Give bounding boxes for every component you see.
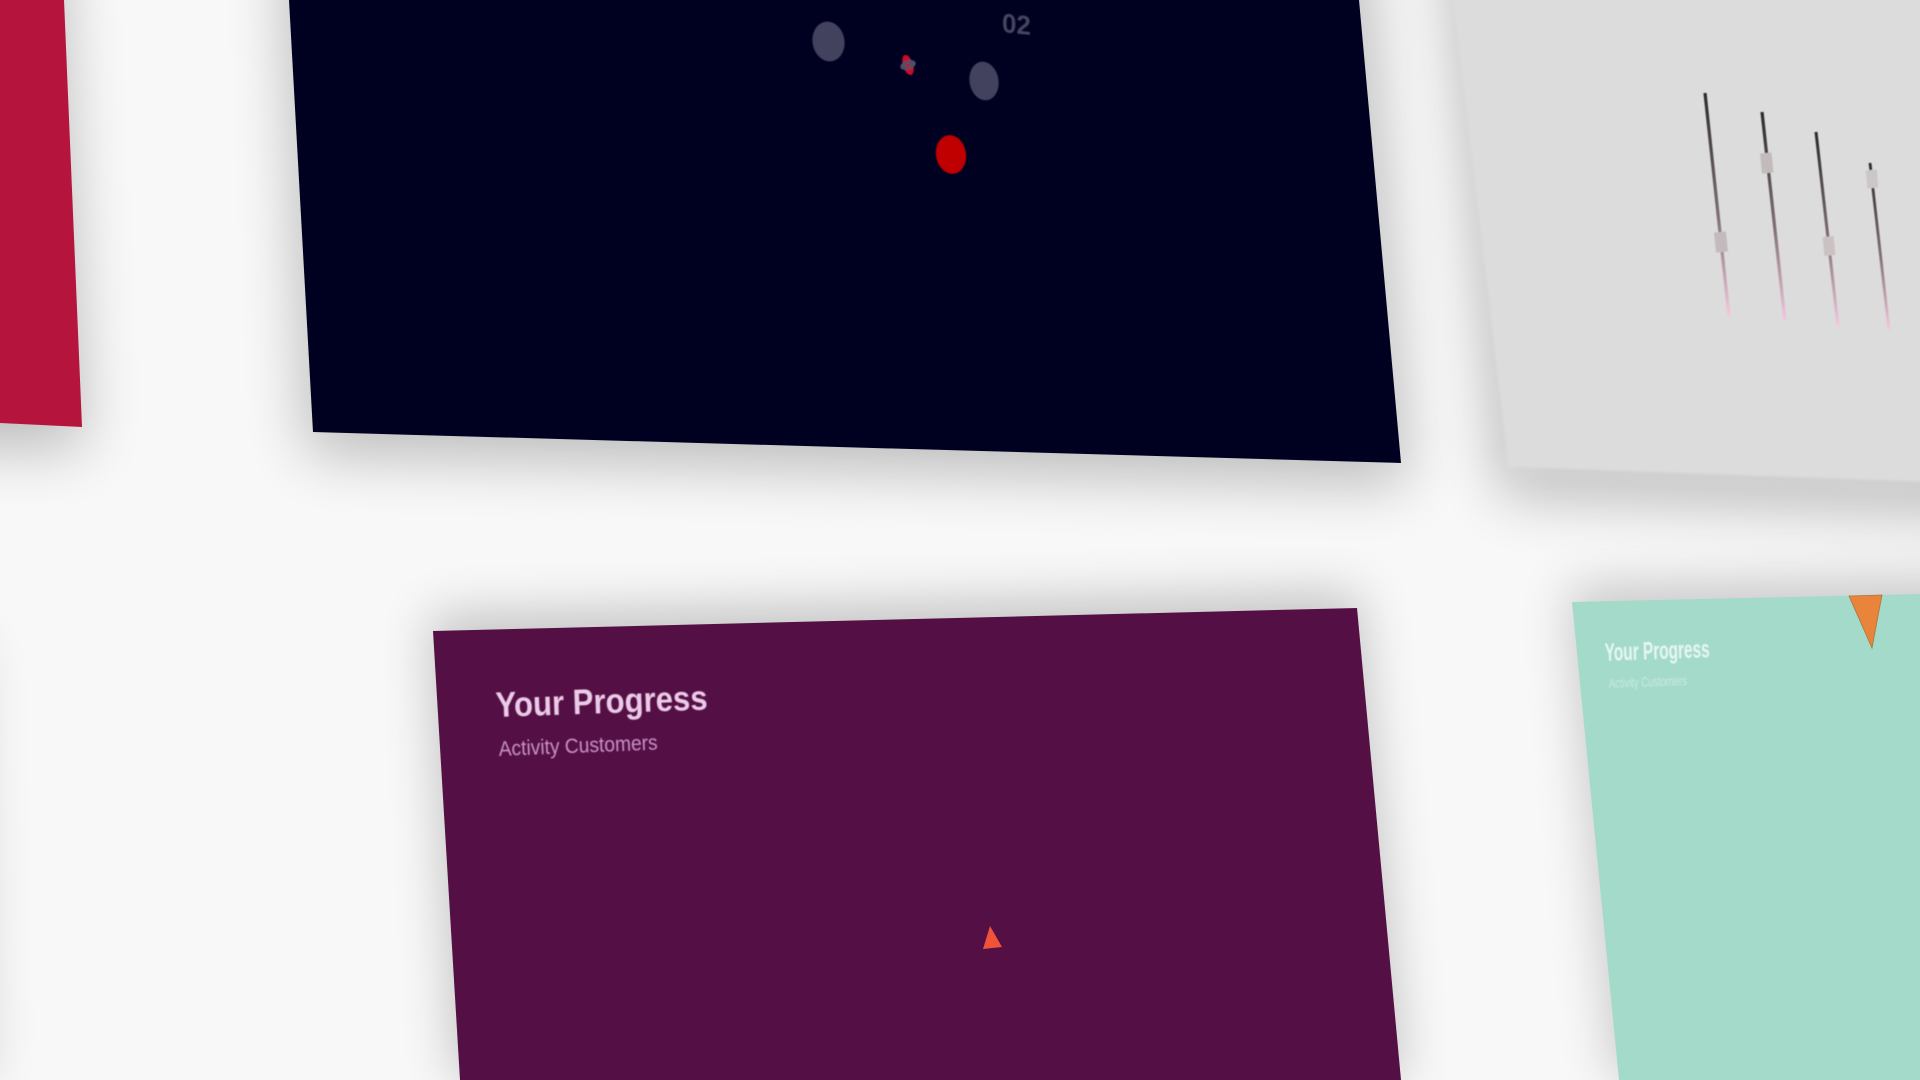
dot: grey left [809, 19, 848, 64]
slider 1 [1705, 93, 1729, 316]
panel: grey slide [1452, 0, 1920, 482]
subheading: Activity Customers: Activity Customers [1609, 672, 1687, 691]
icon: orange triangle [1849, 595, 1882, 648]
slider 2 [1760, 112, 1785, 321]
icon: red triangle [983, 926, 1002, 949]
panel: crimson slide [0, 0, 82, 427]
dot: red large [933, 133, 969, 176]
heading: Your Progress: Your Progress [1604, 635, 1710, 667]
number 02: 02 [1002, 7, 1031, 41]
panel: navy slide [289, 0, 1401, 463]
slider 4 [1866, 163, 1889, 330]
subheading: Activity Customers: Activity Customers [498, 732, 658, 761]
slider 3 [1816, 132, 1838, 326]
dot: small red and grey marker [897, 53, 919, 77]
panel: purple slide [433, 608, 1401, 1080]
dot: grey right [966, 59, 1002, 103]
heading: Your Progress: Your Progress [495, 679, 708, 725]
panel: mint slide [1572, 594, 1920, 1080]
